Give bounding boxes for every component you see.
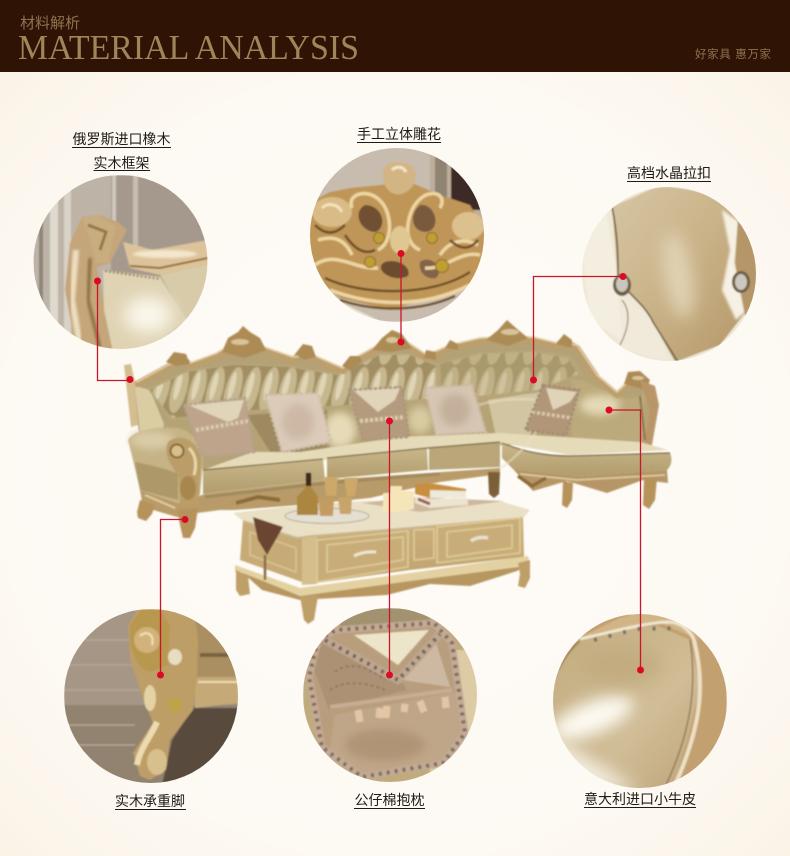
carving mass [305, 182, 490, 310]
label: leg: 实木承重脚 [115, 793, 185, 809]
nail studs [594, 628, 682, 640]
leather panel [552, 626, 700, 790]
right leather [160, 264, 208, 322]
books [415, 483, 466, 498]
seams [612, 207, 678, 362]
right post [640, 380, 659, 445]
top piping [580, 622, 694, 640]
left fold [313, 643, 407, 710]
pillow body [313, 626, 456, 748]
shadow under frame [162, 708, 239, 785]
backrest tufting [150, 355, 436, 418]
seat leather [103, 270, 187, 352]
label: calf leather: 意大利进口小牛皮 [584, 791, 696, 807]
right piping [675, 640, 700, 785]
lower back [137, 372, 650, 470]
callout: leg [157, 516, 188, 678]
circle: crystal buttons [580, 185, 760, 362]
crystal button left [613, 274, 631, 296]
right base rail [513, 469, 668, 493]
left post [124, 364, 138, 427]
left base rail [140, 468, 500, 517]
pillow 1 [184, 398, 254, 457]
sofa backing [134, 338, 652, 445]
carved crest ornaments [166, 320, 650, 390]
table legs [236, 560, 530, 624]
label: oak frame [72, 131, 171, 171]
table left face [240, 520, 302, 582]
tufted backrest [147, 350, 583, 420]
callout: frame [94, 278, 134, 383]
chaise back cushion [572, 380, 645, 441]
label: oak frame: 俄罗斯进口橡木 [72, 131, 170, 147]
left arm [128, 428, 203, 503]
sofa legs [137, 478, 657, 538]
frame band [123, 240, 208, 275]
gold studs [364, 232, 448, 272]
throw cloth [253, 517, 283, 580]
seat tops [203, 433, 668, 470]
pillow 2 [265, 393, 331, 452]
callout lines [94, 250, 644, 678]
watermark arcs [470, 392, 552, 470]
pillow lower [331, 693, 460, 772]
sofa [124, 320, 671, 538]
label: pillow: 公仔棉抱枕 [354, 792, 424, 808]
tassel band [330, 690, 452, 707]
label: crystal: 高档水晶拉扣 [627, 165, 711, 181]
right drawer [437, 518, 520, 563]
swirl highlights [315, 193, 480, 302]
callout: leather [606, 406, 644, 674]
right fold [404, 644, 450, 688]
rail [195, 677, 239, 708]
header slogan: 好家具 惠万家 [695, 47, 772, 61]
side roses [312, 197, 352, 227]
header band [0, 0, 790, 72]
circle: leather [545, 612, 727, 790]
seat 1 [203, 459, 325, 494]
left drawer [317, 531, 408, 582]
header chinese title: 材料解析 [20, 15, 80, 32]
runner cloth [362, 497, 505, 512]
marble top [233, 501, 530, 538]
seat 2 [327, 448, 428, 479]
candles [383, 486, 414, 512]
circle: wood frame [33, 175, 208, 352]
table skirt [243, 566, 525, 600]
central leather panel [612, 185, 745, 362]
arm scroll carving [166, 438, 201, 505]
header english title: MATERIAL ANALYSIS [18, 28, 359, 67]
frame post [65, 215, 127, 352]
crystal button right [732, 271, 750, 293]
diagonal highlight [657, 229, 699, 321]
label: carving: 手工立体雕花 [357, 126, 441, 142]
top bud [383, 162, 416, 194]
bottle [297, 473, 318, 515]
pillow 5 [525, 385, 579, 435]
left side panel [135, 386, 164, 432]
coffee table [233, 473, 530, 624]
callout: carving [398, 250, 404, 346]
right edge [734, 220, 756, 316]
circle: wooden leg [64, 609, 239, 785]
seat 3 [429, 442, 500, 470]
chaise front [502, 443, 671, 476]
pillow flap [354, 630, 429, 665]
centre panel [414, 529, 434, 560]
drawer handles [354, 552, 376, 556]
glasses [318, 477, 358, 516]
top rim [584, 614, 698, 639]
leather below [342, 302, 379, 320]
tray [285, 508, 369, 524]
table molding [235, 556, 530, 596]
leg body [128, 609, 198, 780]
callout: pillow [386, 418, 393, 678]
right highlight [722, 210, 745, 320]
circle: pillow [303, 608, 480, 783]
pillow 4 [425, 385, 486, 435]
carved openings [359, 205, 382, 232]
table front face [302, 517, 524, 585]
callout: buttons [530, 273, 626, 384]
pillow fringe [309, 623, 465, 777]
pillow 3 [349, 387, 409, 440]
label: oak frame: 实木框架 [94, 155, 150, 171]
crest frame [137, 337, 652, 440]
pilaster [302, 536, 317, 585]
circle: carving [310, 148, 484, 322]
upper right leather [195, 621, 236, 678]
